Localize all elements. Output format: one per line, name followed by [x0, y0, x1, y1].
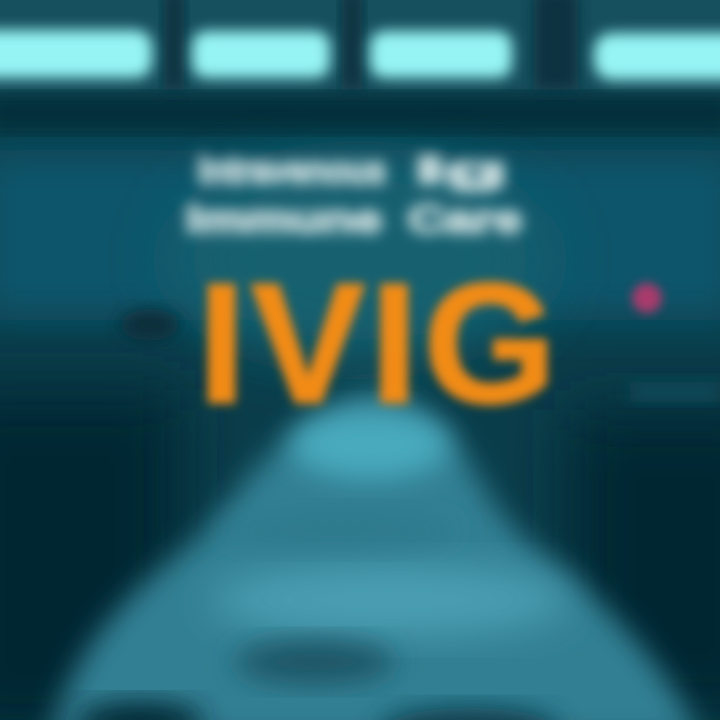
indicator: pink light — [632, 283, 662, 313]
heading: small text lines: Care — [408, 199, 522, 241]
heading: small text lines — [186, 150, 522, 241]
blanket: patient bed — [50, 392, 700, 720]
ceiling band — [0, 0, 720, 128]
title: IVIG: IVIG — [198, 249, 556, 439]
ceiling lights — [0, 30, 720, 80]
heading: small text lines: Immune — [186, 199, 382, 241]
dark wall details — [120, 309, 720, 402]
heading: small text lines: Intravenous — [198, 150, 386, 192]
heading: small text lines: Ig — [415, 150, 507, 192]
